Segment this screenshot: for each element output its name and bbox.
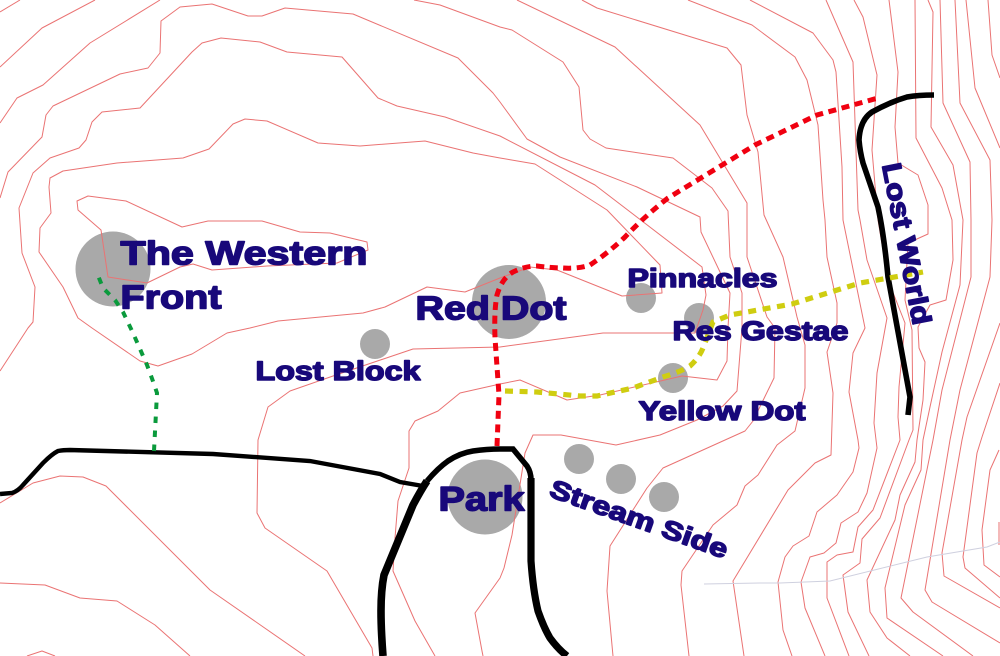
marker: Lost Block	[360, 329, 390, 359]
marker: Stream Side boulder 1	[564, 444, 594, 474]
road: park loop	[381, 449, 567, 656]
marker: Yellow Dot	[658, 363, 688, 393]
marker: Pinnacles	[626, 283, 656, 313]
label: The Western: The Western	[120, 236, 368, 272]
label: Pinnacles: Pinnacles	[628, 263, 778, 293]
marker: Park	[448, 460, 522, 534]
marker: Stream Side boulder 2	[606, 464, 636, 494]
trail: red dotted path to Red Dot and beyond	[495, 98, 878, 446]
marker: Red Dot	[472, 265, 546, 339]
label: Lost Block: Lost Block	[256, 356, 422, 386]
label: Res Gestae: Res Gestae	[672, 316, 848, 346]
marker: The Western Front	[76, 232, 150, 306]
label: Yellow Dot: Yellow Dot	[638, 396, 806, 426]
label: Stream Side: Stream Side	[546, 473, 732, 564]
marker: Stream Side boulder 3	[649, 482, 679, 512]
label: Lost World: Lost World	[876, 160, 937, 327]
road: Lost World track	[859, 95, 934, 415]
marker: Res Gestae	[684, 303, 714, 333]
label: Red Dot: Red Dot	[416, 290, 566, 328]
trail: green dotted path to The Western Front	[97, 273, 157, 451]
crag area markers: grey circles	[76, 232, 714, 534]
label: Park: Park	[438, 480, 525, 518]
label: Front: Front	[120, 280, 222, 316]
stream line	[704, 542, 1000, 584]
trail: yellow dotted path to Lost World	[505, 272, 923, 396]
road: west access road	[0, 450, 423, 494]
